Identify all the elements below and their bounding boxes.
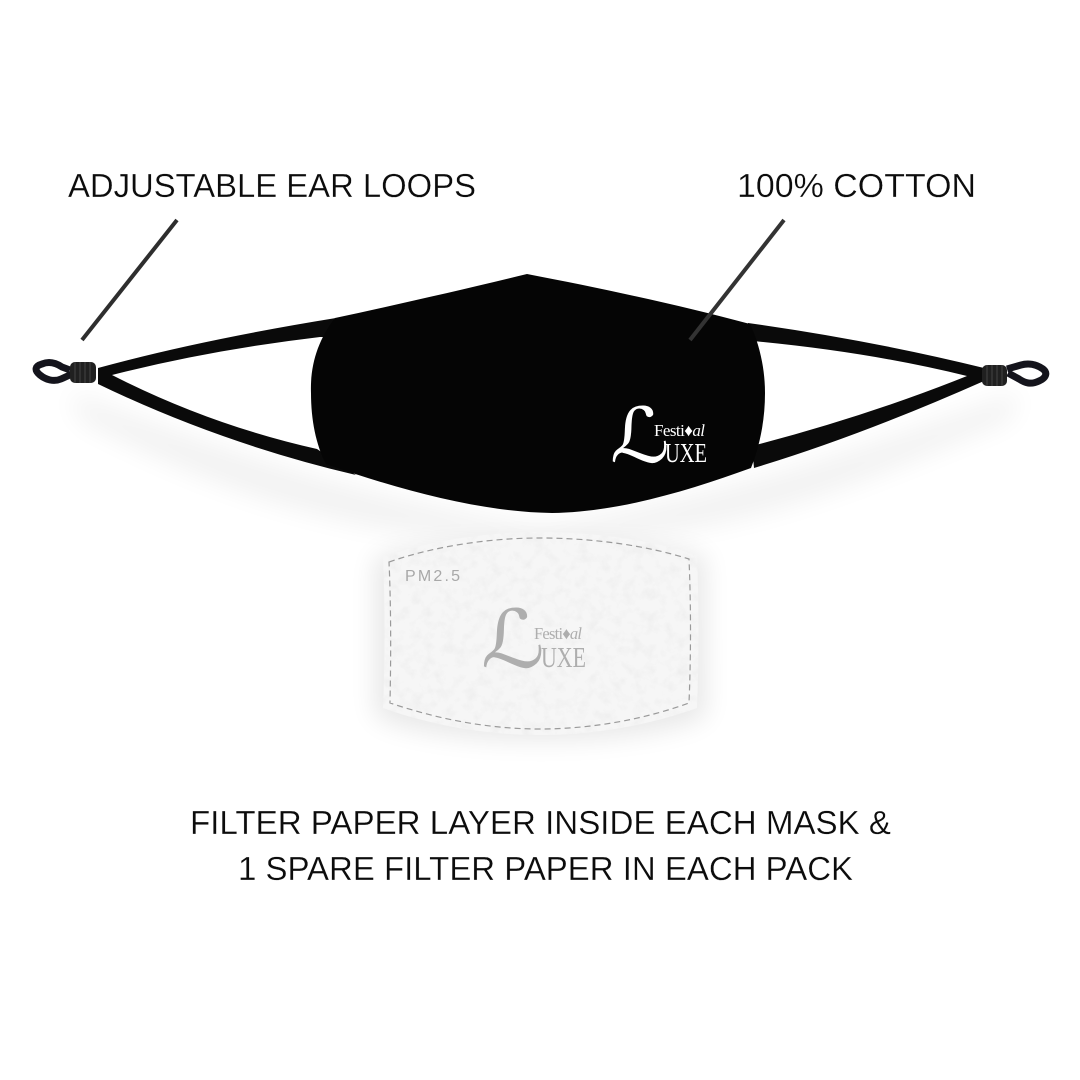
filter logo letter L: ℒ: [481, 593, 545, 686]
left ear strap: [98, 318, 356, 475]
filter paper shadow: [375, 543, 706, 740]
stitching: [389, 538, 690, 729]
caption: [190, 804, 891, 887]
logo letter L: ℒ: [610, 391, 670, 480]
filter logo word festival: Festi♦al: [534, 624, 582, 643]
filter paper: [383, 532, 698, 735]
heading: 100% cotton: 100% COTTON: [737, 167, 976, 204]
filter logo word uxe: UXE: [541, 643, 586, 674]
heading: adjustable ear loops: ADJUSTABLE EAR LOOPS: [68, 167, 476, 204]
logo word festival: Festi♦al: [654, 421, 705, 440]
mask body: [311, 274, 765, 513]
right adjuster loop: [982, 364, 1046, 386]
callout line: ear loops: [82, 220, 177, 340]
soft shadow under mask: [70, 392, 1020, 545]
left adjuster loop: [36, 362, 96, 383]
right ear strap: [745, 323, 984, 468]
filter rating label: PM2.5: [405, 568, 460, 585]
mask with straps: [36, 274, 1046, 513]
caption line 1: FILTER PAPER LAYER INSIDE EACH MASK &: [190, 804, 891, 841]
mask logo: [610, 391, 707, 480]
callout line: cotton: [690, 220, 784, 340]
filter logo: [481, 593, 586, 686]
logo word uxe: UXE: [665, 438, 707, 468]
filter sheet: [383, 532, 698, 735]
caption line 2: 1 SPARE FILTER PAPER IN EACH PACK: [238, 850, 853, 887]
